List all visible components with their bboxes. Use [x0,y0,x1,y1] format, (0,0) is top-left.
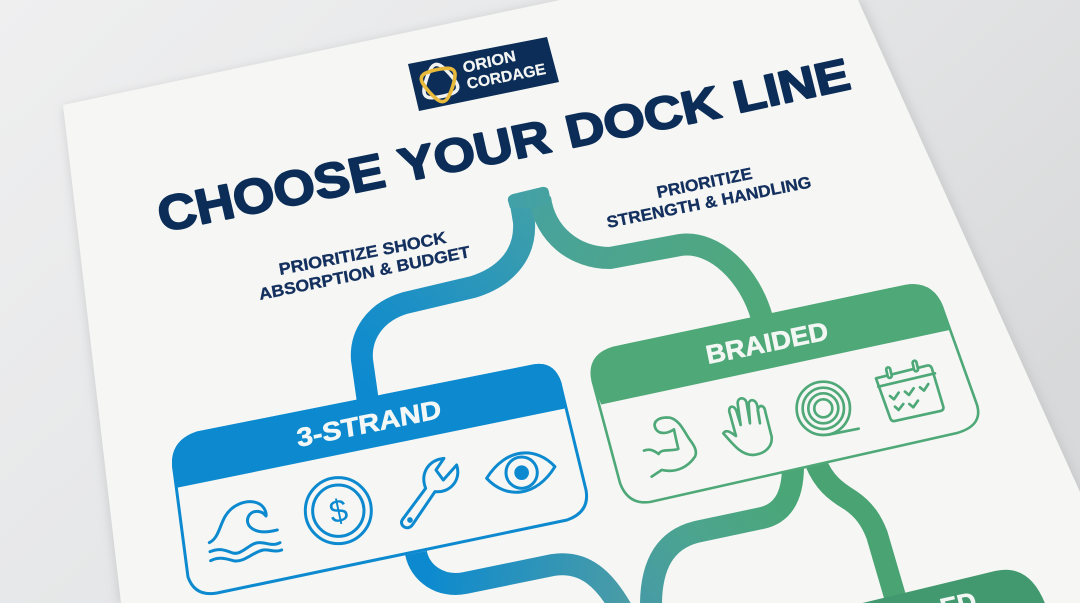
left label line 2: ABSORPTION & BUDGET [258,243,471,304]
icon: rope coil [797,382,859,435]
icon: dollar coin: $ [326,491,351,530]
right label line 2: STRENGTH & HANDLING [605,174,813,232]
card outline [173,365,587,594]
icons group [209,453,555,561]
title word 2: YOUR [394,109,555,192]
left label line 1: PRIORITIZE SHOCK [278,229,448,279]
card title: 3-STRAND [295,394,443,453]
card: lower right, partly cropped [850,570,1046,603]
card: braided [592,285,978,502]
icon: wrench [401,458,458,528]
title word 3: DOCK [560,76,725,158]
logo name line 2: CORDAGE [465,61,547,93]
decision flow: top branches [362,187,762,402]
branch label: left [258,229,471,304]
logo mark: braided ring [415,57,469,111]
branch label: right [605,165,813,232]
icon: flexed arm [644,418,696,477]
right label line 1: PRIORITIZE [655,165,754,202]
start stub [508,187,551,208]
card header [173,365,565,486]
arrow path to braided [540,198,762,318]
icon: hand [723,398,772,455]
logo badge [408,37,559,111]
lower flows [416,463,896,603]
card title: BRAIDED [703,316,831,370]
icon: calendar [876,360,943,421]
card outline [592,285,978,502]
arrow path from braided, right [816,463,896,600]
arrow path to 3-strand [362,198,524,402]
icon: dollar coin [305,478,371,544]
title word 4: LINE [728,49,855,123]
card header [592,285,948,403]
arrow path from 3-strand [416,553,622,603]
icons group [644,360,943,477]
title word 1: CHOOSE [153,144,390,243]
logo name line 1: ORION [461,48,517,77]
arrow path from braided, left [651,466,793,603]
card: 3-strand [173,365,587,594]
title [153,49,855,243]
icon: eye [487,453,555,492]
card header [850,570,1046,603]
icon: wave [209,502,282,561]
